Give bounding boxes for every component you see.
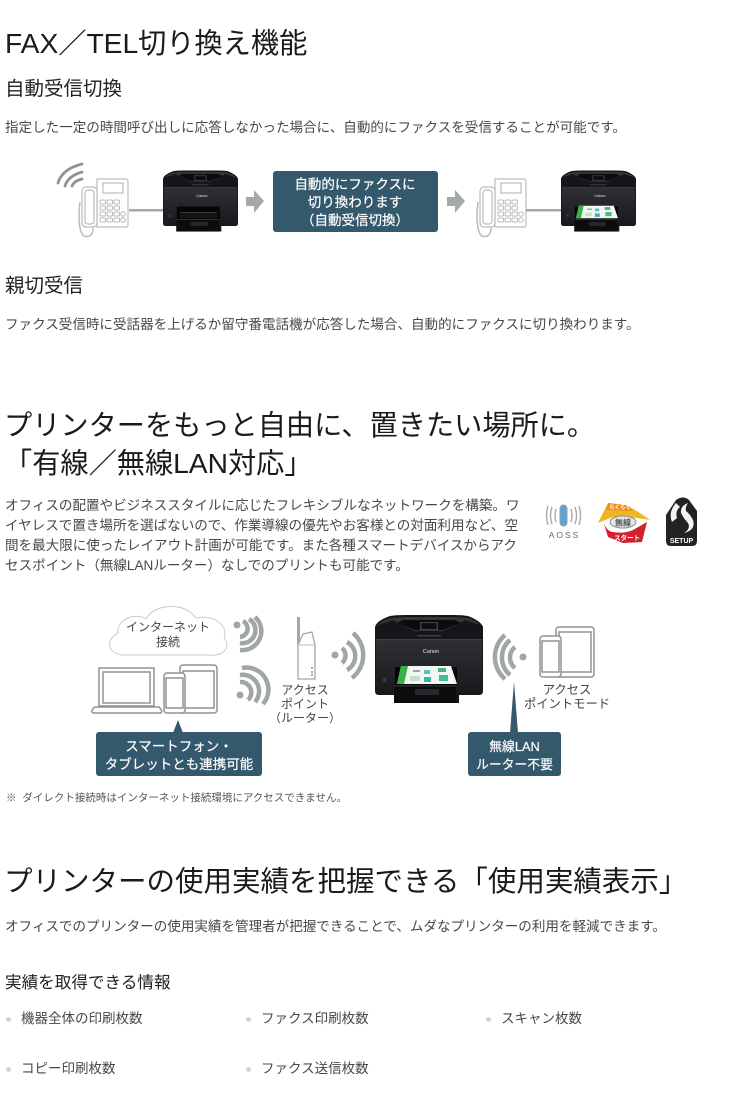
icon: wifi waves lower xyxy=(236,668,268,704)
callout: smartphone and tablet: タブレットとも連携可能 xyxy=(105,756,254,772)
connector line left xyxy=(129,209,165,212)
title: usage history: プリンターの使用実績を把握できる「使用実績表示」 xyxy=(4,866,687,898)
callout: smartphone and tablet: スマートフォン・ xyxy=(125,739,233,754)
icon: Raku Raku wireless start logo: らくらく xyxy=(609,504,631,511)
icon: tablet and smartphone xyxy=(164,665,217,713)
icon: Raku Raku wireless start logo: 無線 xyxy=(615,518,631,528)
arrow: second xyxy=(447,190,465,213)
icon: telephone right xyxy=(477,179,526,236)
label: access point router: アクセス xyxy=(281,683,329,697)
callout: no wireless router needed: 無線LAN xyxy=(489,739,540,754)
icon: printer left xyxy=(163,170,238,232)
title: wired and wireless LAN: プリンターをもっと自由に、置きたい場所に。 xyxy=(4,409,595,441)
icon: signal waves from phone xyxy=(58,164,82,186)
icon: telephone left xyxy=(79,179,128,236)
text: network description: 間を最大限に使ったレイアウト計画が可能です。また各種スマートデバイスからアク xyxy=(5,538,517,553)
icon: Raku Raku wireless start logo xyxy=(598,503,650,543)
icon: laptop xyxy=(92,668,162,713)
list: available information items: 機器全体の印刷枚数 xyxy=(21,1011,142,1026)
icon: printer right with printed fax xyxy=(561,170,636,232)
list: available information items: ファクス印刷枚数 xyxy=(261,1011,369,1026)
label: access point router: ポイント xyxy=(281,697,329,711)
icon: smartphone and tablet xyxy=(540,627,594,677)
label: access point mode xyxy=(524,683,610,711)
list: available information items: スキャン枚数 xyxy=(501,1011,582,1026)
icon: wireless setup logo xyxy=(666,498,697,546)
title: wired and wireless LAN xyxy=(4,409,595,479)
icon: wifi waves to printer xyxy=(332,633,363,678)
icon: internet cloud: インターネット xyxy=(126,620,210,634)
label: access point router xyxy=(269,683,341,725)
text: network description xyxy=(5,498,520,573)
text: automatic reception description: 指定した一定の時間呼び出しに応答しなかった場合に、自動的にファクスを受信することが可能です。 xyxy=(5,120,626,135)
callout: automatic switching box xyxy=(273,171,438,232)
icon: AOSS logo xyxy=(546,505,580,540)
callout: no wireless router needed: ルーター不要 xyxy=(476,757,553,772)
heading: kind reception: 親切受信 xyxy=(5,275,83,297)
icon: wifi waves upper xyxy=(234,617,261,650)
title: FAX/TEL switching: FAX／TEL切り換え機能 xyxy=(5,27,307,59)
title: wired and wireless LAN: 「有線／無線LAN対応」 xyxy=(4,447,313,479)
list: available information items: コピー印刷枚数 xyxy=(21,1061,116,1076)
label: access point mode: ポイントモード xyxy=(524,697,610,711)
heading: available information: 実績を取得できる情報 xyxy=(5,973,171,992)
connector line right xyxy=(526,209,562,212)
icon: internet cloud xyxy=(110,606,227,655)
icon: main printer xyxy=(375,615,483,703)
icon: AOSS logo: AOSS xyxy=(549,530,580,540)
list: available information items: ファクス送信枚数 xyxy=(261,1061,369,1076)
callout: smartphone and tablet xyxy=(96,720,262,776)
callout: automatic switching box: 切り換わります xyxy=(308,195,402,210)
heading: automatic reception: 自動受信切換 xyxy=(5,78,122,100)
label: access point router: （ルーター） xyxy=(269,711,341,725)
callout: automatic switching box: 自動的にファクスに xyxy=(294,177,416,192)
text: network description: イヤレスで置き場所を選ばないので、作業導線の優先やお客様との対面利用など、空 xyxy=(5,518,518,533)
text: kind reception description: ファクス受信時に受話器を上げるか留守番電話機が応答した場合、自動的にファクスに切り換わります。 xyxy=(5,317,640,332)
icon: wireless setup logo: SETUP xyxy=(670,538,693,545)
icon: access point router xyxy=(297,617,315,679)
callout: automatic switching box: （自動受信切換） xyxy=(301,213,409,228)
list: available information items xyxy=(6,1011,582,1076)
arrow: first xyxy=(246,190,264,213)
text: network description: オフィスの配置やビジネススタイルに応じたフレキシブルなネットワークを構築。ワ xyxy=(5,498,520,513)
label: access point mode: アクセス xyxy=(543,683,591,697)
callout: no wireless router needed xyxy=(468,682,561,776)
icon: Raku Raku wireless start logo: スタート xyxy=(614,533,640,542)
icon: internet cloud: 接続 xyxy=(156,634,180,649)
text: usage description: オフィスでのプリンターの使用実績を管理者が把握できることで、ムダなプリンターの利用を軽減できます。 xyxy=(5,919,666,934)
icon: wifi waves from printer xyxy=(495,635,526,679)
note: direct connection: ※ ダイレクト接続時はインターネット接続環境にアクセスできません。 xyxy=(6,792,347,804)
text: network description: セスポイント（無線LANルーター）なしでのプリントも可能です。 xyxy=(5,558,409,573)
